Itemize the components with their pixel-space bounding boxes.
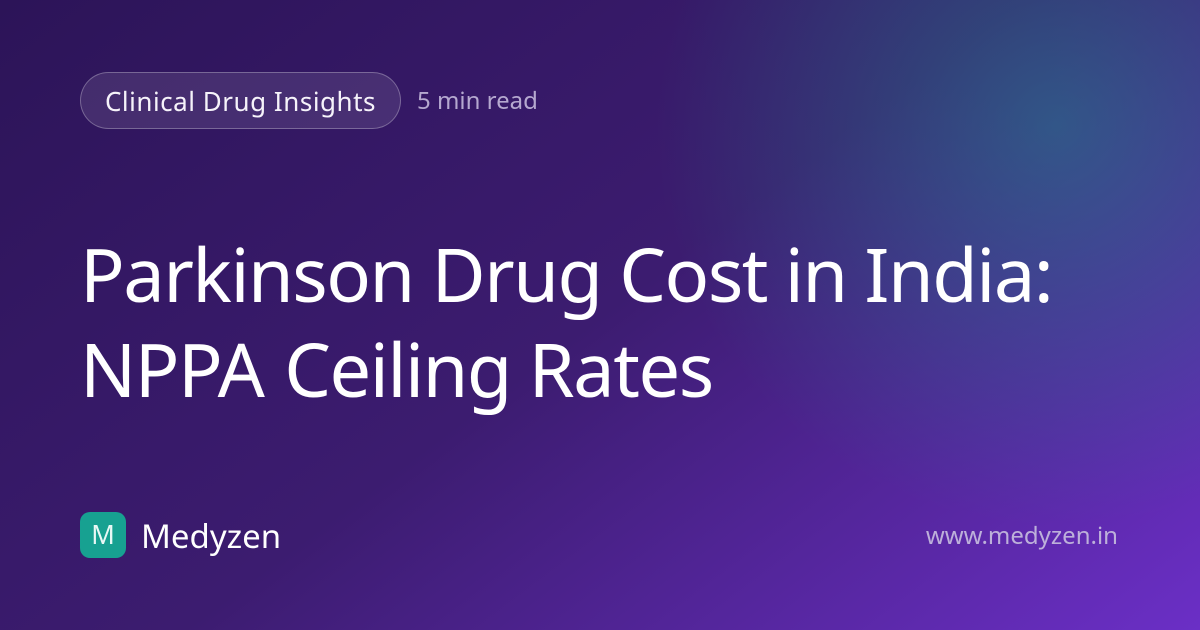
website: www.medyzen.in [926,519,1118,552]
brand logo: M [91,516,115,552]
title [80,223,1052,419]
title: NPPA Ceiling Rates [80,318,713,419]
title: Parkinson Drug Cost in India: [80,223,1052,324]
category pill [80,72,401,129]
brand logo [80,512,126,558]
read time: 5 min read [417,84,538,117]
category pill: Clinical Drug Insights [105,83,376,119]
brand name: Medyzen [141,513,281,558]
